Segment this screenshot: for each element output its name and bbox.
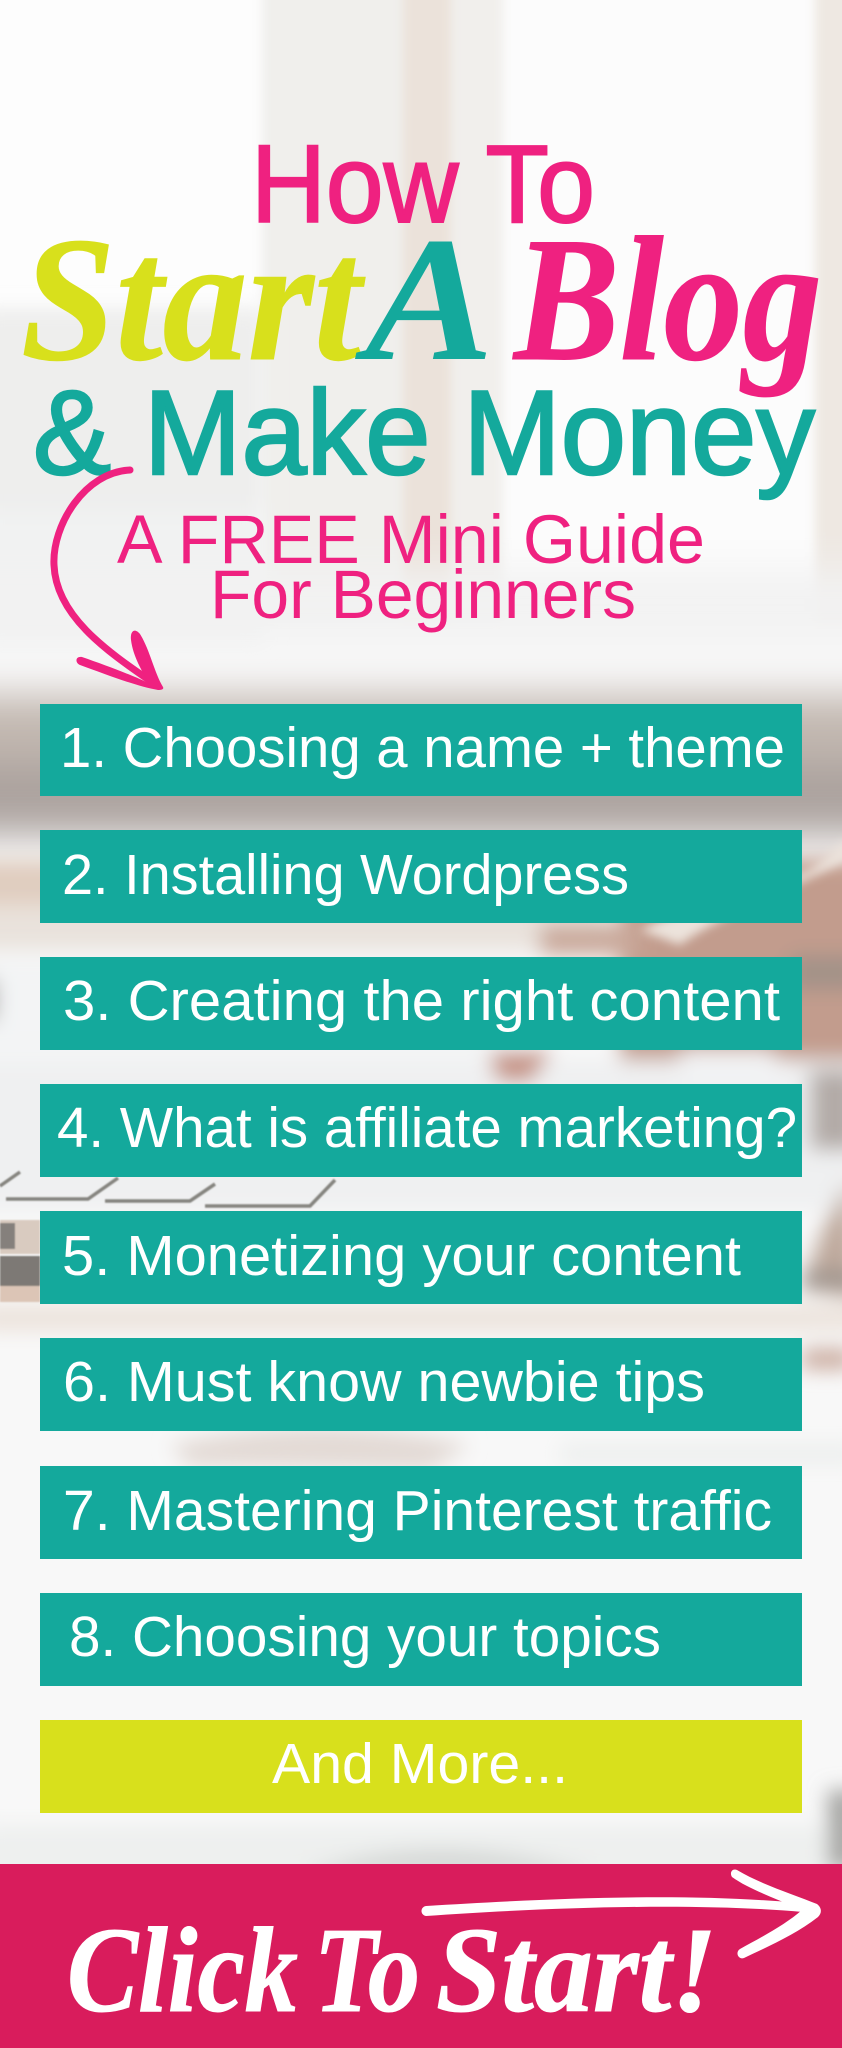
title: Make Money: & Make Money bbox=[33, 366, 815, 500]
arrow: curved pink arrow bbox=[54, 470, 163, 690]
list item 2: 2. Installing Wordpress bbox=[62, 843, 629, 907]
list item 7: 7. Mastering Pinterest traffic bbox=[63, 1479, 772, 1543]
list item: and more: And More... bbox=[272, 1732, 568, 1796]
list item 8 bbox=[40, 1593, 802, 1686]
list item 4 bbox=[40, 1084, 802, 1177]
list item 6: 6. Must know newbie tips bbox=[63, 1350, 705, 1414]
list item 4: 4. What is affiliate marketing? bbox=[57, 1096, 797, 1160]
title: How To: How To bbox=[251, 123, 595, 246]
list item 3: 3. Creating the right content bbox=[63, 969, 780, 1033]
list item 5 bbox=[40, 1211, 802, 1304]
call to action text: Click bbox=[67, 1903, 298, 2038]
call to action text bbox=[67, 1903, 717, 2038]
list item 6 bbox=[40, 1338, 802, 1431]
list item 1 bbox=[40, 704, 802, 796]
list item 1: 1. Choosing a name + theme bbox=[60, 716, 785, 780]
subtitle: For Beginners bbox=[210, 556, 636, 633]
list item 7 bbox=[40, 1466, 802, 1559]
arrow: white right arrow bbox=[422, 1869, 821, 1958]
subtitle bbox=[117, 501, 705, 633]
title: Start: Start bbox=[21, 200, 365, 398]
call to action text: Start! bbox=[436, 1903, 717, 2038]
subtitle: A FREE Mini Guide bbox=[117, 501, 705, 578]
call to action banner bbox=[0, 1864, 842, 2048]
list item 3 bbox=[40, 957, 802, 1050]
title: A: A bbox=[354, 200, 494, 398]
list item: and more bbox=[40, 1720, 802, 1813]
list item 5: 5. Monetizing your content bbox=[62, 1224, 741, 1288]
list item 8: 8. Choosing your topics bbox=[69, 1605, 661, 1669]
list item 2 bbox=[40, 830, 802, 923]
call to action text: To bbox=[314, 1903, 420, 2038]
